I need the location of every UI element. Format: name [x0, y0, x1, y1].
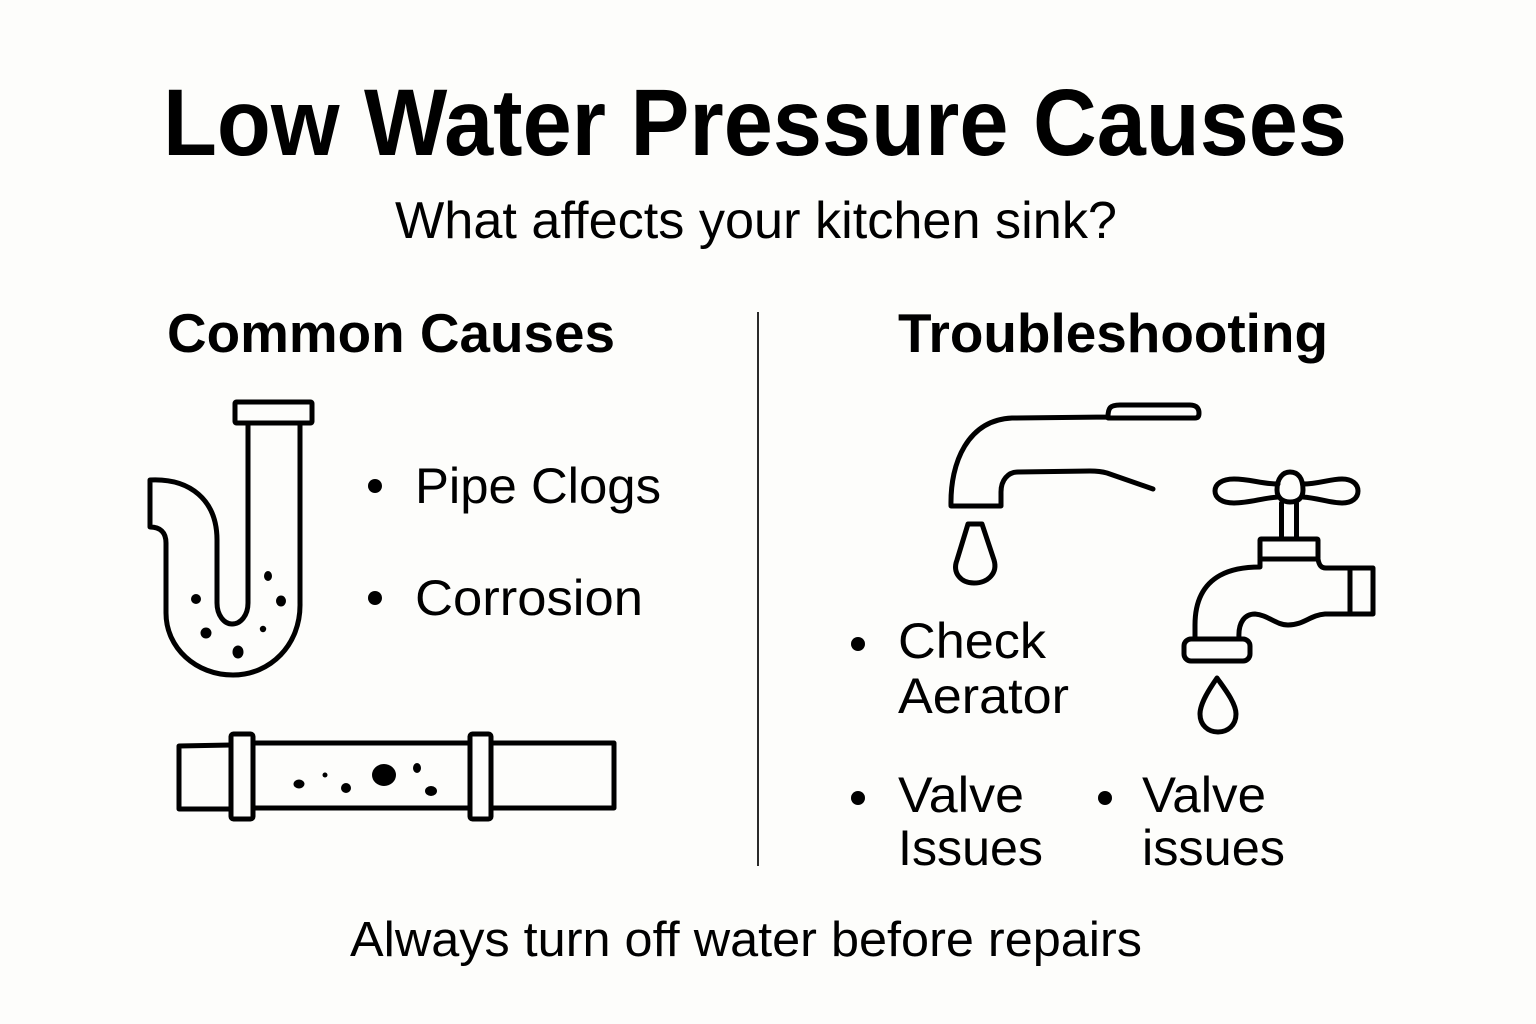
heading: troubleshooting: Troubleshooting: [898, 302, 1328, 364]
icon: clogged p-trap pipe: [150, 402, 312, 675]
icon: spout faucet with drop: [951, 405, 1199, 583]
bullet: valve issues, second: Valve: [1142, 767, 1266, 823]
bullet: pipe clogs: Pipe Clogs: [415, 458, 661, 514]
panel: troubleshooting: [851, 302, 1373, 876]
bullet: check aerator: Aerator: [898, 668, 1069, 724]
bullet: valve issues, second: issues: [1142, 820, 1285, 876]
heading: common causes: Common Causes: [167, 302, 615, 364]
panel: common causes: [150, 302, 661, 819]
bullet: valve issues: Issues: [898, 820, 1043, 876]
center divider: [757, 312, 759, 866]
bullet: valve issues: [851, 767, 1043, 876]
bullet: check aerator: [851, 613, 1069, 724]
bullet: check aerator: Check: [898, 613, 1047, 669]
icon: corroded straight pipe: [179, 734, 614, 819]
title: Low Water Pressure Causes: [163, 70, 1347, 176]
footer note: Always turn off water before repairs: [350, 913, 1142, 967]
subtitle: What affects your kitchen sink?: [395, 192, 1117, 250]
bullet: valve issues, second: [1098, 767, 1285, 876]
icon: tap with handle and drop: [1184, 472, 1373, 732]
bullet: valve issues: Valve: [898, 767, 1024, 823]
bullet: corrosion: Corrosion: [415, 570, 643, 626]
